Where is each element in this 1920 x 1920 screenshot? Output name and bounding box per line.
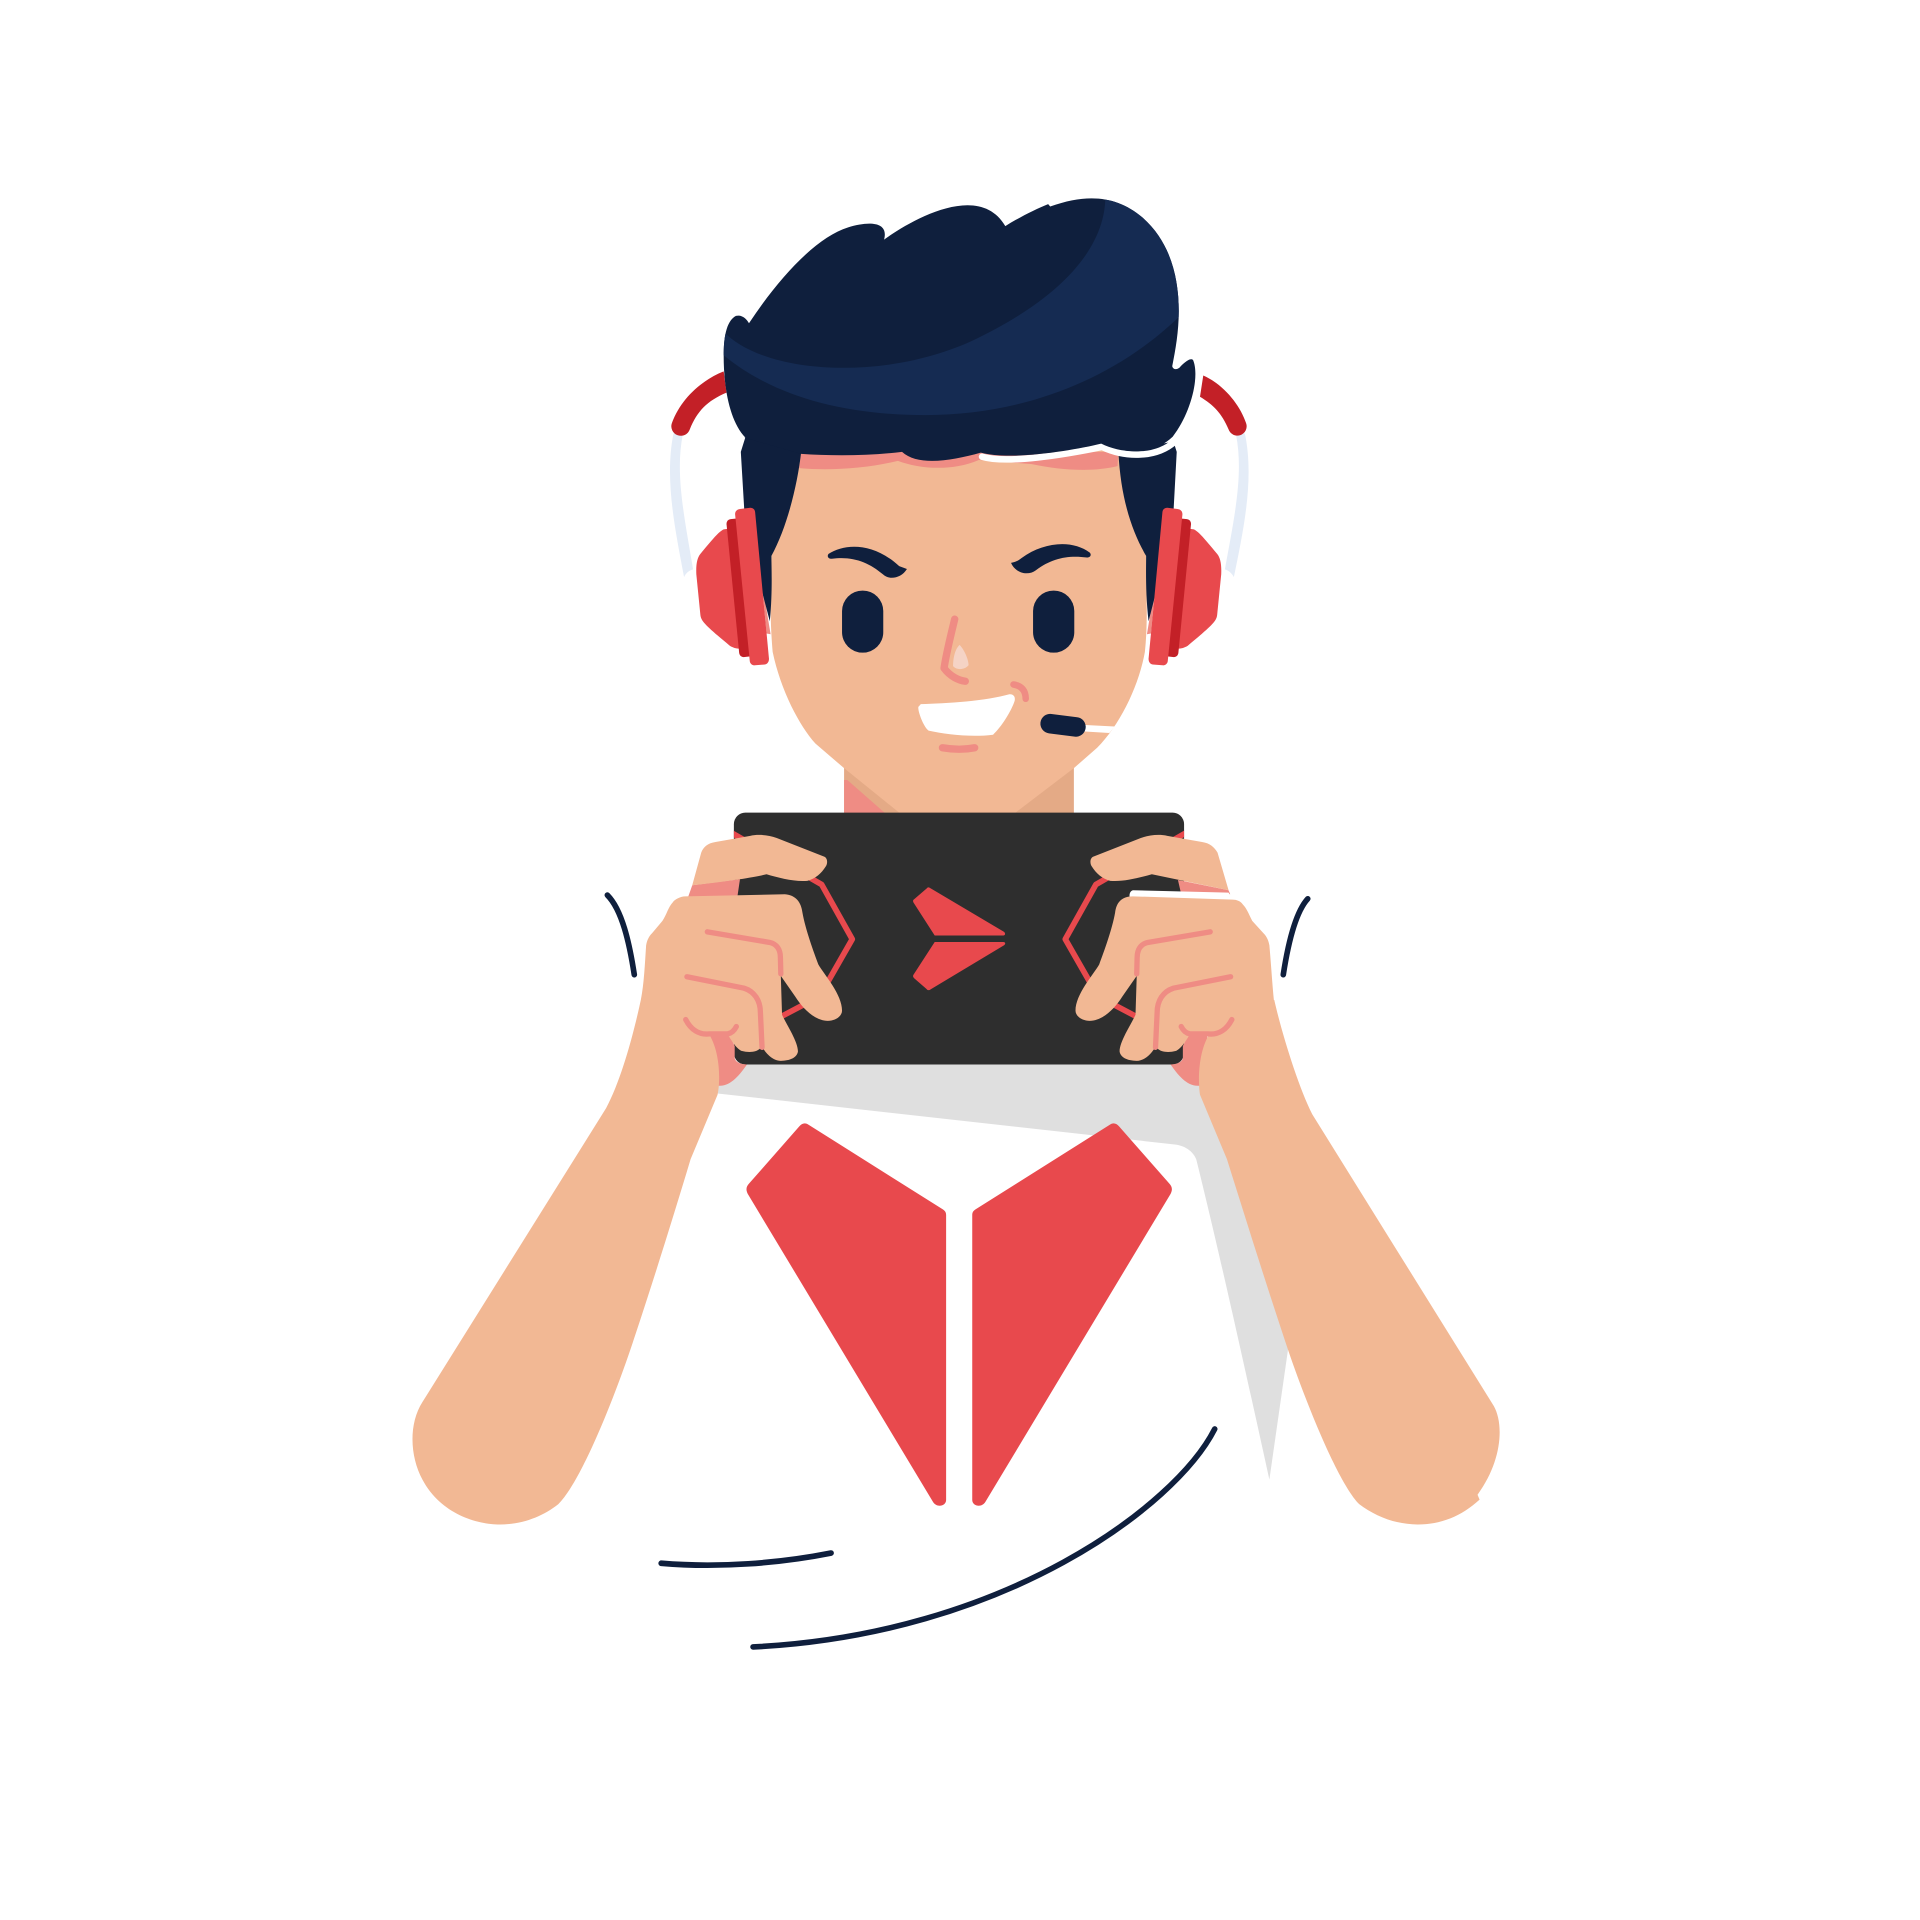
illustration: gamer holding a tablet <box>412 198 1500 1650</box>
mouth <box>918 694 1015 736</box>
right index finger <box>1090 835 1229 890</box>
microphone <box>1050 724 1076 727</box>
ear cup left <box>696 508 769 665</box>
left wrist shadow <box>710 1034 747 1086</box>
neck <box>844 748 1074 829</box>
hair highlight band <box>720 197 1187 415</box>
hair side lock right <box>1118 442 1177 621</box>
tablet logo <box>913 887 1005 990</box>
face <box>771 446 1147 813</box>
shirt emblem right wing <box>972 1123 1172 1506</box>
forehead shadow <box>799 452 1118 470</box>
motion line right hand <box>1283 899 1308 975</box>
eyebrow right <box>1011 544 1091 573</box>
motion line bottom short <box>661 1553 831 1565</box>
left hand <box>641 894 842 1061</box>
ear cup right <box>1149 508 1221 665</box>
motion line bottom long <box>753 1429 1215 1647</box>
tablet body <box>734 813 1184 1064</box>
lower lip <box>942 748 975 749</box>
nose <box>944 619 969 681</box>
right finger shadow <box>1178 880 1230 894</box>
hair <box>724 198 1195 461</box>
cheek crease <box>1013 684 1026 699</box>
ear slivers <box>762 580 1156 634</box>
head with headset <box>670 197 1249 829</box>
shirt emblem left wing <box>746 1123 946 1506</box>
shirt shadow <box>718 1064 1289 1480</box>
hair outline highlight <box>982 442 1175 459</box>
headband: light blue back strips <box>670 433 1249 577</box>
eyebrow left <box>828 547 907 578</box>
motion line left hand <box>607 895 634 975</box>
eye right <box>1033 591 1074 653</box>
left finger shadow <box>687 879 740 899</box>
shirt emblem and short motion line <box>661 1123 1172 1565</box>
left forearm <box>412 1000 719 1524</box>
hair side lock left <box>741 438 801 621</box>
lower body and tablet <box>412 813 1500 1524</box>
eye left <box>842 591 883 653</box>
headband: red arcs <box>671 371 1247 436</box>
right forearm <box>1199 1000 1500 1524</box>
motion lines <box>607 895 1308 1647</box>
right wrist shadow <box>1171 1034 1207 1086</box>
right hand <box>1076 896 1274 1061</box>
right hand white edge <box>1129 890 1234 902</box>
microphone boom <box>1083 725 1115 733</box>
left index finger <box>692 835 827 885</box>
tablet red outline <box>731 832 1187 1017</box>
